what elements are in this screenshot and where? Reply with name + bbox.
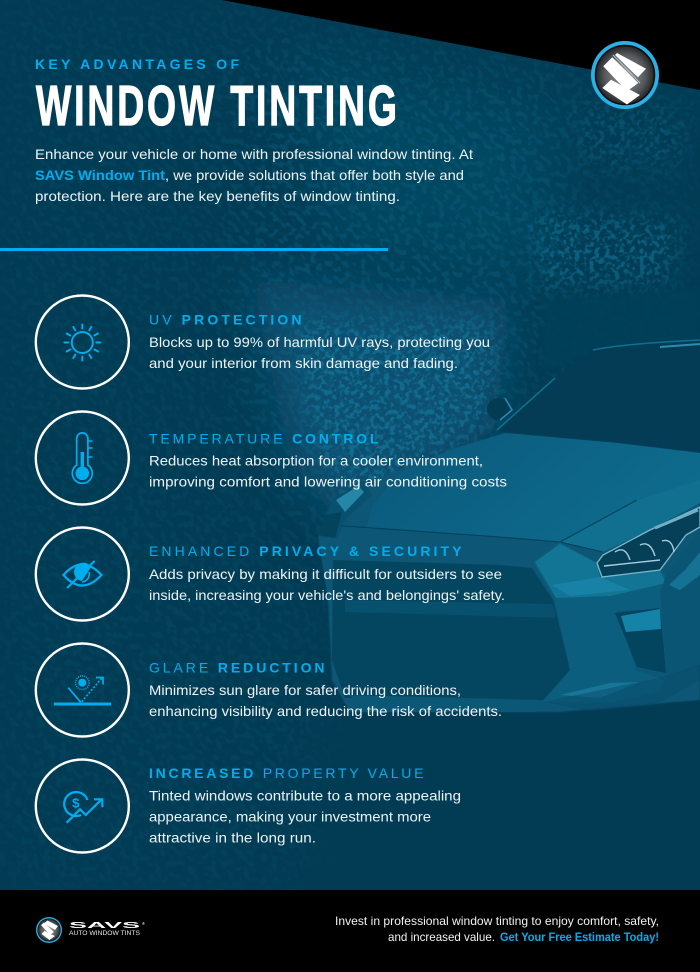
footer logo bbox=[36, 917, 145, 943]
intro paragraph: SAVS Window Tint , we provide solutions that offer both style and bbox=[35, 167, 464, 183]
benefit: privacy and security bbox=[36, 528, 505, 620]
description: Blocks up to 99% of harmful UV rays, protecting you bbox=[149, 334, 490, 350]
description: Tinted windows contribute to a more appealing bbox=[149, 788, 461, 804]
description bbox=[149, 566, 505, 603]
description bbox=[149, 682, 502, 719]
description: Minimizes sun glare for safer driving conditions, bbox=[149, 682, 461, 698]
footer call to action: and increased value. bbox=[388, 930, 495, 944]
description: enhancing visibility and reducing the risk of accidents. bbox=[149, 703, 502, 719]
footer call to action: Invest in professional window tinting to enjoy comfort, safety, bbox=[335, 914, 659, 928]
icon: sun in circle bbox=[36, 296, 129, 388]
car body bbox=[318, 433, 700, 712]
benefit: temperature control bbox=[36, 412, 507, 504]
footer logo: ® bbox=[142, 921, 145, 926]
description bbox=[149, 788, 461, 846]
description: appearance, making your investment more bbox=[149, 808, 431, 824]
icon: dollar growth in circle: $ bbox=[72, 796, 80, 810]
footer logo: AUTO WINDOW TINTS bbox=[69, 931, 140, 937]
description bbox=[149, 334, 490, 371]
divider rule bbox=[0, 248, 388, 251]
description: Adds privacy by making it difficult for outsiders to see bbox=[149, 566, 502, 582]
footer call to action bbox=[335, 914, 659, 944]
icon: thermometer in circle bbox=[36, 412, 129, 504]
heading: GLARE REDUCTION bbox=[149, 660, 324, 676]
heading: UV PROTECTION bbox=[149, 312, 302, 328]
description: Reduces heat absorption for a cooler environment, bbox=[149, 452, 483, 468]
heading: INCREASED PROPERTY VALUE bbox=[149, 765, 424, 781]
header block bbox=[35, 56, 473, 204]
icon: glare reflection in circle bbox=[36, 644, 129, 736]
footer logo: SAVS bbox=[69, 920, 141, 930]
description: attractive in the long run. bbox=[149, 830, 316, 846]
logo badge bbox=[591, 41, 659, 109]
description: inside, increasing your vehicle's and belongings' safety. bbox=[149, 587, 505, 603]
benefit: glare reduction bbox=[36, 644, 502, 736]
benefit: UV protection bbox=[36, 296, 490, 388]
footer band bbox=[0, 890, 700, 972]
description: and your interior from skin damage and fading. bbox=[149, 355, 458, 371]
intro paragraph bbox=[35, 146, 473, 204]
description: improving comfort and lowering air conditioning costs bbox=[149, 474, 507, 490]
black top-right corner bbox=[222, 0, 700, 90]
heading: ENHANCED PRIVACY & SECURITY bbox=[149, 543, 462, 559]
footer call to action: Get Your Free Estimate Today! bbox=[500, 930, 659, 944]
heading: TEMPERATURE CONTROL bbox=[149, 430, 379, 446]
title: WINDOW TINTING bbox=[36, 74, 400, 138]
benefit: increased property value bbox=[36, 760, 461, 852]
icon: dollar growth in circle bbox=[36, 760, 129, 852]
intro paragraph: Enhance your vehicle or home with professional window tinting. At bbox=[35, 146, 473, 162]
description bbox=[149, 452, 507, 490]
intro paragraph: protection. Here are the key benefits of window tinting. bbox=[35, 188, 400, 204]
icon: crossed eye in circle bbox=[36, 528, 129, 620]
eyebrow heading: KEY ADVANTAGES OF bbox=[35, 56, 239, 72]
